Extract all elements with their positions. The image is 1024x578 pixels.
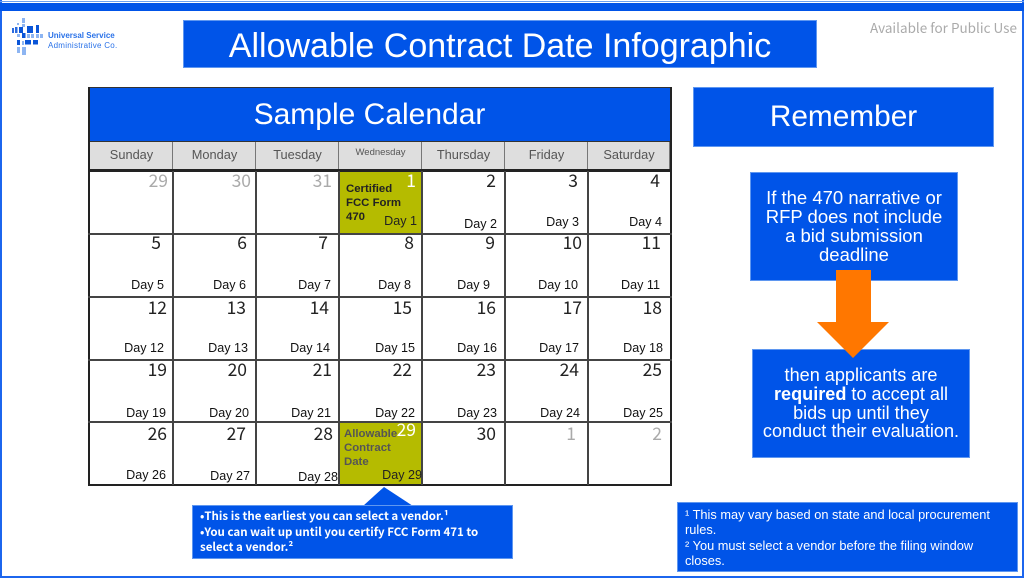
text: Day 27 — [210, 469, 250, 483]
logo text — [48, 31, 117, 50]
text: Day 26 — [126, 468, 166, 482]
text: 18 — [643, 295, 662, 320]
cell text: Date — [344, 456, 369, 468]
text: 12 — [148, 295, 167, 320]
top frame highlight line — [0, 1, 1024, 2]
text: Day 22 — [375, 406, 415, 420]
text: Day 29 — [382, 468, 422, 482]
text box: condition: RFP does not include — [766, 206, 942, 227]
text: Day 6 — [213, 278, 246, 292]
calendar day counters — [124, 214, 663, 484]
footnotes: ² You must select a vendor before the filing window — [685, 538, 973, 553]
text: Day 12 — [124, 341, 164, 355]
text: 30 — [232, 168, 251, 193]
text: Day 4 — [629, 215, 662, 229]
text: Day 18 — [623, 341, 663, 355]
text: 28 — [314, 421, 333, 446]
calendar grid lines — [88, 87, 672, 504]
text: 1 — [406, 168, 416, 193]
text: Day 21 — [291, 406, 331, 420]
text: 2 — [486, 168, 496, 193]
text: 16 — [477, 295, 496, 320]
text: Day 24 — [540, 406, 580, 420]
text: 31 — [313, 168, 332, 193]
text: 20 — [228, 357, 247, 382]
cell text — [344, 428, 397, 468]
text: 27 — [227, 421, 246, 446]
text: Day 17 — [539, 341, 579, 355]
text: Day 11 — [621, 278, 660, 292]
text: Friday — [529, 147, 564, 162]
footnotes — [677, 502, 1018, 572]
highlighted cell: allowable contract date — [339, 422, 421, 485]
title: Allowable Contract Date Infographic — [229, 27, 771, 65]
cell text: 470 — [346, 211, 365, 223]
cell text: Contract — [344, 442, 391, 454]
text: Thursday — [437, 147, 490, 162]
icon: logo mark — [12, 18, 43, 55]
callout text: •You can wait up until you certify FCC Form 471 to — [200, 524, 478, 540]
text: 23 — [477, 357, 496, 382]
heading: remember — [693, 87, 994, 147]
text box: condition: deadline — [819, 244, 889, 265]
text: Day 7 — [298, 278, 331, 292]
footnotes: ¹ This may vary based on state and local procurement — [685, 507, 990, 522]
calendar heading: Sample Calendar — [254, 98, 485, 131]
text: Day 13 — [208, 341, 248, 355]
text box: condition: a bid submission — [785, 225, 923, 246]
heading: remember: Remember — [770, 100, 917, 133]
text: 19 — [148, 357, 167, 382]
text: Day 15 — [375, 341, 415, 355]
text: Day 28 — [298, 470, 338, 484]
calendar heading — [88, 87, 671, 142]
text: 4 — [650, 168, 660, 193]
text: 13 — [227, 295, 246, 320]
cell text: Certified — [346, 183, 392, 195]
calendar date numbers — [148, 168, 662, 446]
text: Day 23 — [457, 406, 497, 420]
callout pointer — [364, 487, 412, 505]
logo text: Universal Service — [48, 31, 115, 40]
text: Sunday — [110, 147, 153, 162]
text: 29 — [149, 168, 168, 193]
callout text: •This is the earliest you can select a vendor.¹ — [200, 508, 449, 524]
text: 29 — [397, 417, 416, 442]
text: Day 25 — [623, 406, 663, 420]
text box: requirement: then applicants are — [785, 365, 937, 385]
text: 30 — [477, 421, 496, 446]
text: 3 — [568, 168, 578, 193]
text: Day 9 — [457, 278, 490, 292]
text: 10 — [563, 230, 582, 255]
text box: condition: If the 470 narrative or — [766, 187, 942, 208]
text: 17 — [563, 295, 582, 320]
text: Day 20 — [209, 406, 249, 420]
text: Day 1 — [384, 214, 417, 228]
text: 24 — [560, 357, 579, 382]
text: Monday — [192, 147, 237, 162]
callout text: select a vendor.² — [200, 539, 293, 555]
arrow: down — [817, 270, 889, 358]
callout: earliest vendor selection — [192, 487, 513, 559]
title — [183, 20, 817, 68]
text: Day 5 — [131, 278, 164, 292]
text: 21 — [313, 357, 332, 382]
footnotes: rules. — [685, 522, 716, 537]
cell text: FCC Form — [346, 197, 401, 209]
text: Day 8 — [378, 278, 411, 292]
text: 9 — [485, 230, 495, 255]
logo: Universal Service Administrative Co. — [12, 18, 117, 55]
highlighted cell: certified form 470 — [339, 172, 421, 233]
text: Day 14 — [290, 341, 330, 355]
text: Day 16 — [457, 341, 497, 355]
cell text: Allowable — [344, 428, 397, 440]
cell text — [346, 183, 401, 223]
text: 22 — [393, 357, 412, 382]
text: Day 3 — [546, 215, 579, 229]
text: 25 — [643, 357, 662, 382]
text: Tuesday — [273, 147, 322, 162]
text box: requirement — [752, 349, 970, 458]
text: Wednesday — [356, 147, 406, 158]
text: 26 — [148, 421, 167, 446]
text: Day 19 — [126, 406, 166, 420]
text: 14 — [310, 295, 329, 320]
weekday header row — [90, 142, 670, 169]
top frame bar — [0, 3, 1024, 11]
text: 2 — [652, 421, 662, 446]
logo text: Administrative Co. — [48, 41, 117, 50]
text: 8 — [404, 230, 414, 255]
text: 7 — [318, 230, 328, 255]
text: Saturday — [603, 147, 655, 162]
text box: requirement: conduct their evaluation. — [763, 421, 959, 441]
callout text — [192, 505, 513, 559]
text: Day 10 — [538, 278, 578, 292]
text: 5 — [151, 230, 161, 255]
text box: requirement: required to accept all — [774, 384, 948, 404]
text box: condition — [750, 172, 958, 281]
text: 1 — [566, 421, 576, 446]
footnotes: closes. — [685, 553, 725, 568]
label: availability note: Available for Public Use — [870, 17, 1017, 37]
text: 11 — [642, 230, 661, 255]
text: 6 — [237, 230, 247, 255]
text: 15 — [393, 295, 412, 320]
text: Day 2 — [464, 217, 497, 231]
text box: requirement: bids up until they — [793, 403, 929, 423]
